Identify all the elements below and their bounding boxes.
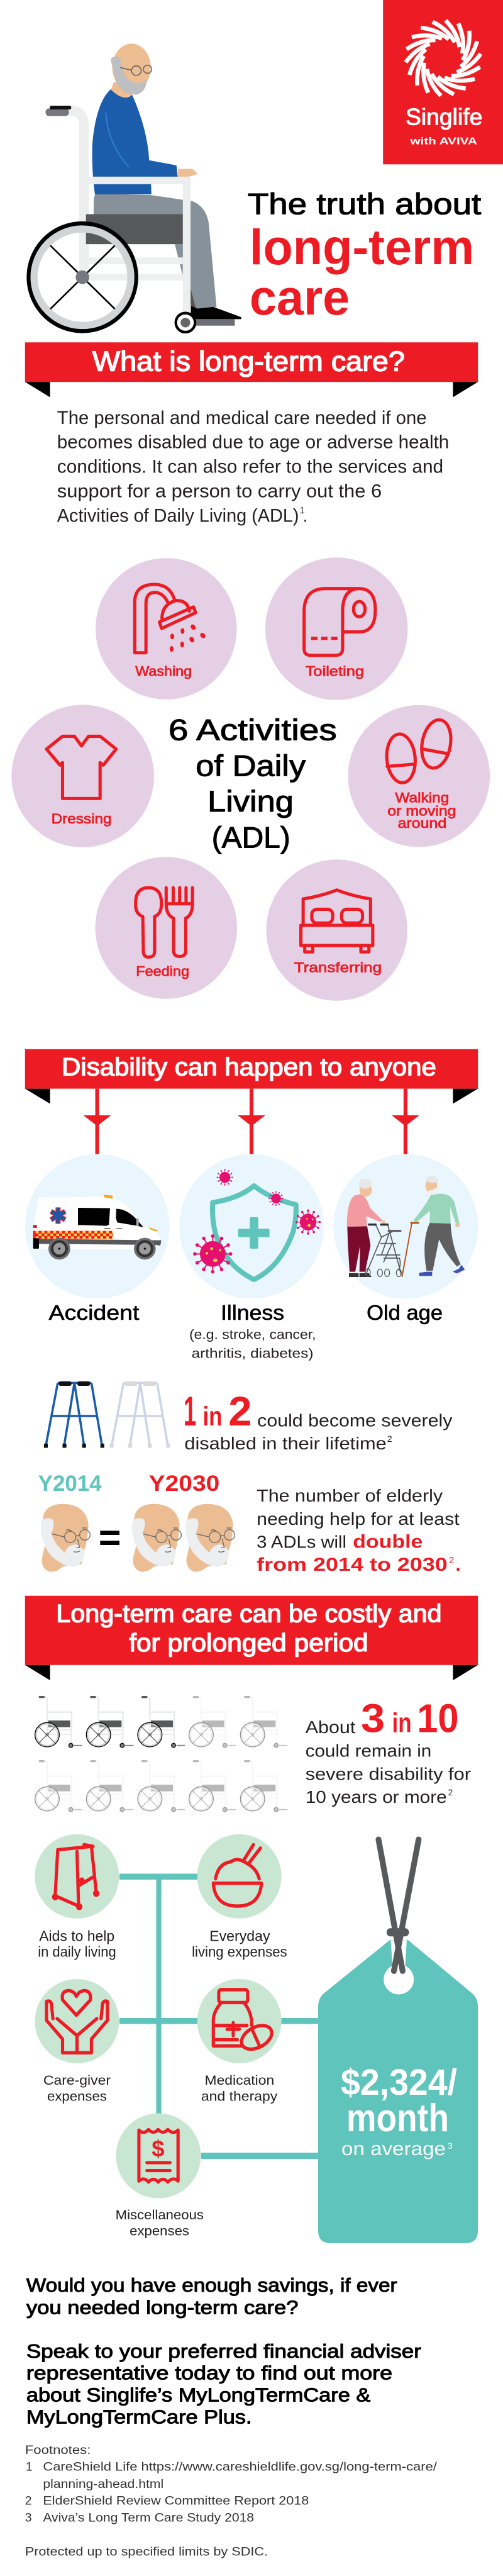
face: 2030 first xyxy=(132,1504,181,1572)
banner: costly and prolonged: for prolonged period xyxy=(129,1629,368,1657)
panel: disability can happen to anyone xyxy=(25,1049,478,1575)
arrow: to old age xyxy=(392,1089,419,1154)
intro paragraph: The personal and medical care needed if one xyxy=(57,408,427,428)
stat: 3 in 10: in xyxy=(392,1707,412,1738)
row 1 xyxy=(35,1696,287,1748)
logo background xyxy=(383,0,503,164)
logo xyxy=(406,20,482,147)
label: everyday: living expenses xyxy=(192,1944,287,1960)
banner: costly and prolonged: Long-term care can be costly and xyxy=(56,1600,442,1628)
intro paragraph: . xyxy=(303,506,307,527)
activity: walking or moving around: or moving xyxy=(387,803,456,818)
illustration: shield and viruses xyxy=(193,1169,321,1280)
heading: 6 activities of daily living: 6 Activities xyxy=(169,714,337,747)
panel: 6 activities of daily living xyxy=(11,557,490,1001)
labels: care-giver and medication: and therapy xyxy=(201,2089,278,2104)
labels: causes: Old age xyxy=(367,1302,443,1325)
banner: costly and prolonged xyxy=(25,1596,478,1680)
stat: 1 in 2: disabled in their lifetime xyxy=(184,1434,387,1453)
intro paragraph: 1 xyxy=(300,506,304,516)
text: illness examples: arthritis, diabetes) xyxy=(192,1346,313,1361)
footnotes: planning-ahead.html xyxy=(43,2478,163,2491)
price tag text: $2,324/ xyxy=(341,2062,457,2103)
face: 2030 second xyxy=(185,1504,235,1572)
footnotes: Aviva’s Long Term Care Study 2018 xyxy=(43,2511,254,2524)
panel: Y2014 versus Y2030 faces xyxy=(38,1471,235,1572)
panel: header and intro xyxy=(25,0,503,527)
heading: 6 activities of daily living: (ADL) xyxy=(212,821,290,854)
text: illness examples xyxy=(189,1327,316,1361)
row 2 xyxy=(35,1760,287,1812)
heading: 6 activities of daily living xyxy=(169,714,337,854)
circle: medication xyxy=(197,1979,282,2063)
footnotes xyxy=(25,2444,438,2559)
banner: disability can happen to anyone: Disability can happen to anyone xyxy=(62,1054,436,1081)
stat: 1 in 2: 2 xyxy=(228,1388,252,1435)
tag string xyxy=(379,1839,419,1971)
label: everyday: Everyday xyxy=(209,1928,270,1944)
stat: 1 in 2: 2 xyxy=(387,1434,392,1444)
equals sign xyxy=(100,1531,119,1545)
illustration: man in wheelchair xyxy=(28,43,241,332)
activity: walking or moving around xyxy=(348,705,490,847)
stat: 1 in 2: 1 xyxy=(184,1388,196,1435)
title: care xyxy=(250,270,350,325)
activity: walking or moving around: Walking xyxy=(395,790,449,806)
call to action xyxy=(26,2275,421,2428)
activity: walking or moving around: around xyxy=(398,815,446,831)
call to action: representative today to find out more xyxy=(26,2363,392,2384)
circle: care-giver xyxy=(35,1979,119,2063)
text: illness examples: (e.g. stroke, cancer, xyxy=(189,1327,316,1342)
title: The truth about xyxy=(248,187,481,221)
icon: caring hands and heart xyxy=(47,1990,108,2053)
stat: 1 in 2: in xyxy=(202,1402,223,1432)
connector lines xyxy=(119,1873,321,2159)
activity: dressing: Dressing xyxy=(52,811,112,827)
illustration: elderly couple with walker and cane xyxy=(347,1176,465,1277)
stat: 3 in 10: 3 xyxy=(361,1697,385,1741)
footnotes: 3 xyxy=(25,2511,32,2524)
price tag text xyxy=(341,2062,457,2160)
stat: 3 in 10: About xyxy=(306,1717,356,1737)
banner: what is long-term care xyxy=(25,342,478,398)
text: elderly needing help: 3 ADLs will xyxy=(257,1532,346,1552)
logo text: Singlife xyxy=(406,103,482,130)
footnotes: Protected up to specified limits by SDIC. xyxy=(25,2546,268,2559)
label: Y2030: Y2030 xyxy=(149,1471,219,1496)
activity: toileting: Toileting xyxy=(306,663,364,679)
intro paragraph: Activities of Daily Living (ADL) xyxy=(57,506,299,527)
stat: 3 in 10: 10 xyxy=(417,1697,459,1741)
footnotes: Footnotes: xyxy=(25,2444,91,2457)
banner: what is long-term care: What is long-term care? xyxy=(92,346,405,377)
label: everyday xyxy=(192,1928,287,1960)
text: elderly needing help xyxy=(257,1486,461,1575)
label: aids xyxy=(38,1928,116,1960)
stat: 3 in 10: 2 xyxy=(448,1788,453,1797)
labels: causes xyxy=(49,1302,443,1325)
logo text xyxy=(406,103,482,147)
icon: receipt xyxy=(139,2129,178,2182)
activity: toileting xyxy=(265,557,407,700)
price tag text: on average xyxy=(341,2138,446,2160)
chart: 3 in 10 wheelchairs pictogram xyxy=(35,1696,287,1812)
icon: blue walking frame xyxy=(44,1381,104,1448)
icon: receipt: $ xyxy=(152,2136,165,2161)
labels: causes: Illness xyxy=(221,1302,284,1325)
labels: causes: Accident xyxy=(49,1302,140,1325)
price tag text: 3 xyxy=(448,2141,453,2151)
label: miscellaneous xyxy=(116,2207,204,2238)
intro paragraph: becomes disabled due to age or adverse health xyxy=(57,432,449,453)
panel: price tag string xyxy=(379,1839,419,1994)
text: elderly needing help: . xyxy=(455,1554,461,1575)
text: elderly needing help: 2 xyxy=(449,1556,454,1566)
arrow: to illness xyxy=(238,1089,265,1154)
activity: feeding xyxy=(96,857,237,999)
price tag text: month xyxy=(346,2097,449,2140)
text: elderly needing help: needing help for at least xyxy=(257,1509,460,1529)
title: long-term xyxy=(250,220,474,276)
footnotes: 2 xyxy=(25,2494,32,2507)
labels: care-giver and medication: Care-giver xyxy=(43,2073,111,2088)
call to action: Speak to your preferred financial adviser xyxy=(26,2341,421,2362)
activity: feeding: Feeding xyxy=(136,964,189,979)
title xyxy=(248,187,481,325)
icon: walking aid xyxy=(52,1844,99,1910)
activity: washing xyxy=(96,558,237,700)
text: elderly needing help: from 2014 to 2030 xyxy=(257,1554,448,1575)
text: elderly needing help: The number of elderly xyxy=(257,1486,443,1505)
labels: care-giver and medication xyxy=(43,2073,278,2104)
icon: rice bowl xyxy=(213,1844,262,1906)
face: 2014 xyxy=(41,1504,90,1572)
circle: everyday xyxy=(197,1834,282,1919)
text: elderly needing help: double xyxy=(353,1532,423,1553)
tag hole xyxy=(384,1940,414,1994)
icon: faded walking frame xyxy=(109,1381,170,1448)
call to action: MyLongTermCare Plus. xyxy=(26,2407,252,2428)
panel: closing text and footnotes xyxy=(25,2073,438,2559)
activity: washing: Washing xyxy=(135,663,192,679)
heading: 6 activities of daily living: Living xyxy=(207,785,294,818)
activity: transferring xyxy=(266,859,407,1001)
stat: 1 in 2: could become severely xyxy=(257,1410,453,1430)
logo swirl xyxy=(406,20,481,96)
heading: 6 activities of daily living: of Daily xyxy=(196,750,306,783)
intro paragraph: support for a person to carry out the 6 xyxy=(57,481,382,502)
activity: dressing xyxy=(11,705,154,847)
activity: transferring: Transferring xyxy=(294,959,382,975)
label: miscellaneous: expenses xyxy=(130,2224,189,2238)
icon: medicine bottle and pill xyxy=(213,1990,275,2054)
call to action: about Singlife’s MyLongTermCare & xyxy=(26,2385,370,2406)
intro paragraph xyxy=(57,408,449,527)
call to action: you needed long-term care? xyxy=(26,2297,298,2319)
panel: long-term care can be costly xyxy=(25,1596,478,1807)
circle: miscellaneous xyxy=(116,2114,201,2198)
circle: aids xyxy=(35,1834,119,1919)
stat: 3 in 10: severe disability for xyxy=(306,1764,471,1784)
circle: old age xyxy=(334,1154,478,1298)
footnotes: CareShield Life https://www.careshieldlife.gov.sg/long-term-care/ xyxy=(43,2461,438,2474)
footnotes: ElderShield Review Committee Report 2018 xyxy=(43,2494,309,2507)
stat: 1 in 2 xyxy=(184,1388,453,1453)
circle: accident xyxy=(25,1154,169,1298)
footnotes: 1 xyxy=(26,2461,33,2474)
stat: 3 in 10: could remain in xyxy=(306,1741,431,1761)
label: aids: Aids to help xyxy=(39,1928,114,1944)
arrow: to accident xyxy=(84,1089,111,1154)
intro paragraph: conditions. It can also refer to the services and xyxy=(57,457,443,477)
stat: 3 in 10: 10 years or more xyxy=(306,1787,447,1807)
stat: 3 in 10 xyxy=(306,1697,471,1807)
logo text: with AVIVA xyxy=(409,136,477,147)
illustration: ambulance xyxy=(33,1195,162,1259)
label: miscellaneous: Miscellaneous xyxy=(116,2207,204,2222)
panel: expense icons xyxy=(38,1844,287,2054)
labels: care-giver and medication: expenses xyxy=(47,2089,107,2104)
circle: illness xyxy=(179,1154,324,1298)
banner: disability can happen to anyone xyxy=(25,1049,478,1104)
label: aids: in daily living xyxy=(38,1944,116,1960)
price tag body xyxy=(318,1940,478,2243)
label: Y2014: Y2014 xyxy=(38,1471,102,1496)
call to action: Would you have enough savings, if ever xyxy=(26,2275,397,2296)
labels: care-giver and medication: Medication xyxy=(205,2073,274,2088)
